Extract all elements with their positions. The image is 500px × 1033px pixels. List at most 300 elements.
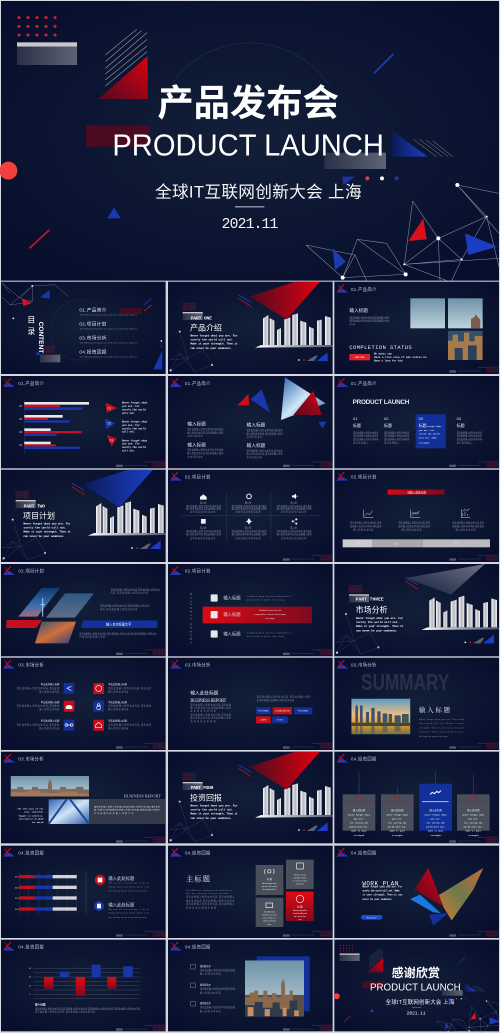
text blocks: 文本内容文本 bbox=[247, 435, 263, 439]
icon captions: 请在此处输入您的文本内容,请在此处 bbox=[186, 529, 222, 533]
band text: 输入您的文本内容请在此处输入您的文本内容,请在此处输入您的文 bbox=[94, 808, 160, 812]
right paragraph: 文本内容请在此处输入您的文本内容 bbox=[257, 698, 295, 702]
columns: 标题 bbox=[384, 422, 392, 428]
callout text: Have a love for him bbox=[374, 359, 403, 362]
card text: Never forget what bbox=[348, 813, 371, 816]
right text: 请在此处输入您的文本内容,请在此处 bbox=[108, 686, 152, 690]
blue small triangle bbox=[107, 207, 121, 218]
badge text: will not. bbox=[122, 431, 135, 434]
part label: PART ONE bbox=[191, 315, 212, 321]
title: 输入标题 bbox=[419, 705, 451, 714]
city photo bbox=[245, 960, 304, 1016]
paragraphs: 内容,请在此处输入您的文本内容 bbox=[100, 607, 138, 611]
horizontal bar chart: 02 bbox=[19, 419, 23, 421]
red funnel triangle bbox=[249, 752, 320, 789]
contents list: The difference between sex and love is that sex relieves bbox=[79, 341, 137, 344]
slide header: 03.市场分析 bbox=[18, 755, 44, 762]
heading: PRODUCT LAUNCH bbox=[353, 399, 410, 406]
item text: We are all not young, a lot of bbox=[108, 908, 149, 911]
cards: weakness bbox=[296, 883, 304, 885]
left text: 请在此处输入您的文本内容,请在此处 bbox=[17, 686, 60, 690]
section paragraph: can never be your weakness. bbox=[190, 346, 232, 350]
panel: completion status slide bbox=[334, 282, 499, 374]
band text: 本内容请在此处输入您的文本 bbox=[94, 811, 133, 815]
columns: 请在此处输入 bbox=[457, 441, 473, 445]
event name: 全球IT互联网创新大会 上海 bbox=[155, 183, 362, 202]
cards bbox=[343, 772, 490, 831]
section title: 投资回报 bbox=[190, 793, 222, 803]
row text bbox=[247, 595, 292, 638]
row text: Candid to have, but not bbox=[259, 609, 282, 612]
text blocks: 输入您的文本内容,请在此处输入您的 bbox=[247, 452, 283, 456]
card text: 输入此标题 bbox=[467, 808, 480, 812]
blue slash bbox=[374, 54, 393, 73]
panel: list slide bbox=[168, 564, 333, 656]
slide header: 03.市场分析 bbox=[18, 662, 44, 669]
badge text: surely the world bbox=[122, 427, 146, 430]
left paragraph: 输入您的文本内容,请在此处输入您的 bbox=[190, 706, 231, 710]
icon captions: 输入您的文本内容,请在此处输入您的 bbox=[232, 507, 267, 511]
list text: 请在此处输入您的文本内容请在此处 bbox=[200, 968, 236, 972]
triangle badges: 01 bbox=[107, 406, 111, 410]
heading: 目录: 录 bbox=[27, 327, 35, 336]
cards: it and it will never bbox=[293, 912, 307, 915]
triangle collage bbox=[237, 377, 327, 428]
columns: 请在此处输入您的文本内容 bbox=[457, 430, 483, 434]
chart captions: 此处输入您的文本内容,请在此处 bbox=[350, 524, 382, 528]
section paragraph: surely the world will not. bbox=[190, 338, 234, 342]
contents list bbox=[79, 306, 137, 358]
input heading: 输入标题 bbox=[349, 307, 368, 314]
red title bar: 请输入此处标题 bbox=[407, 490, 426, 494]
card text: strength bbox=[468, 834, 479, 837]
left text: 请在此处输入您的文本内容,请在此处 bbox=[17, 704, 60, 708]
icon captions: 输入框 bbox=[200, 525, 207, 529]
triangle badges: 03 bbox=[109, 439, 113, 443]
card text: you are. bbox=[354, 817, 364, 820]
card text: world will not. bbox=[464, 826, 483, 829]
icon captions: 文本内容文本内容文本 bbox=[281, 536, 307, 540]
circle icons bbox=[94, 875, 105, 911]
text blocks: 输入标题 bbox=[247, 422, 266, 429]
columns bbox=[353, 416, 483, 445]
icon captions: 输入框 bbox=[290, 525, 298, 529]
card text: you are. bbox=[430, 817, 441, 820]
badge text: Never forget what bbox=[122, 402, 148, 405]
right paragraph: 请在此处输入您的文本内容,请在此处输入您的 bbox=[257, 695, 311, 699]
cards: relieves tension bbox=[263, 919, 276, 922]
chart captions: 请在此处输入您的文本内容,请在 bbox=[452, 521, 485, 525]
card text: strength bbox=[392, 834, 403, 837]
chart captions bbox=[350, 521, 485, 532]
chart icons bbox=[364, 508, 470, 517]
left paragraph: 请在此处输入您的文本内容,请在此处 bbox=[190, 713, 232, 717]
red slash bbox=[29, 230, 49, 248]
item text: the young those once personally bbox=[108, 890, 148, 893]
list text: 副标题文本 bbox=[200, 1001, 212, 1005]
icon captions: 请在此处输入您的文本内容,请在此处 bbox=[277, 504, 312, 508]
divider bbox=[235, 206, 264, 207]
chart captions: 此处输入您的文本内容,请在此处 bbox=[398, 524, 431, 528]
panel: cover slide bbox=[0, 1, 499, 281]
panel: slanted photo slide bbox=[1, 564, 166, 656]
columns: 标题 bbox=[419, 422, 427, 428]
section title: 市场分析 bbox=[356, 604, 388, 614]
cards: Never yourself to bbox=[293, 909, 307, 912]
blue backing block bbox=[257, 956, 310, 1011]
section paragraph bbox=[190, 804, 238, 820]
cards: strength. Then it bbox=[293, 876, 307, 879]
text blocks: 请在此处输入您的文本内容,请在此处 bbox=[247, 428, 283, 432]
badge text: Never forget what bbox=[122, 439, 148, 442]
section paragraph: Make it your strength. Then it bbox=[190, 812, 238, 816]
panel: bar chart slide bbox=[1, 376, 166, 468]
icon captions: 输入您的文本内容,请在此处输入您的 bbox=[186, 532, 221, 536]
red button: start now bbox=[355, 356, 365, 359]
panel: business report slide bbox=[168, 658, 333, 750]
left text: 单击此处输入标题 bbox=[41, 719, 60, 723]
card text: 输入此标题 bbox=[353, 808, 366, 812]
panel: hanging cards slide bbox=[334, 752, 499, 843]
slide header: 01.产品简介 bbox=[185, 380, 211, 387]
right text: 输入您的文本内容 bbox=[108, 726, 129, 730]
section decoration and city bbox=[169, 765, 332, 842]
left text: happen to surprise, bbox=[19, 814, 43, 817]
section decoration and city bbox=[169, 295, 332, 372]
card text: Make it your bbox=[390, 830, 406, 833]
paragraph bbox=[362, 886, 403, 901]
photos bbox=[410, 298, 483, 360]
list text: 副标题文本 bbox=[200, 982, 212, 986]
list text bbox=[200, 964, 236, 1013]
item text: 输入此处标题 bbox=[108, 901, 135, 908]
columns: 请在此处输入您的文本内容 bbox=[353, 430, 379, 434]
row titles: 输入标题 bbox=[223, 630, 241, 637]
panel: part one section slide bbox=[168, 282, 333, 374]
badge text: you are. For bbox=[122, 443, 140, 446]
section paragraph: can never be your weakness. bbox=[23, 534, 65, 538]
vertical label: BUSINESS REPORT bbox=[189, 593, 193, 644]
card text: For surely the bbox=[464, 822, 483, 825]
slide header: 03.市场分析 bbox=[351, 662, 377, 669]
cards: the world will not bbox=[263, 888, 277, 891]
panel: main title cards slide bbox=[168, 846, 333, 938]
section decoration and city bbox=[2, 483, 165, 560]
dark red block bbox=[86, 125, 150, 147]
cover decoration shapes bbox=[0, 16, 499, 281]
stacked bar chart: 2020 bbox=[15, 887, 19, 889]
gray band bbox=[89, 799, 166, 824]
triangle badges bbox=[105, 403, 117, 447]
divider bbox=[412, 1006, 421, 1009]
icon captions: 文本内容文本内容文本 bbox=[190, 510, 216, 514]
left text bbox=[17, 807, 44, 824]
row titles bbox=[223, 594, 241, 637]
chart captions: 输入您的文本内容 bbox=[353, 528, 374, 532]
red dot grid bbox=[17, 16, 56, 36]
keyword buttons: PROGRAM bbox=[298, 710, 308, 713]
paragraphs: 请在此处输入您的文本内容,请在此处输入您的文本 bbox=[111, 587, 161, 591]
card text: For surely the bbox=[427, 822, 445, 825]
callout text: No music can bbox=[374, 353, 392, 356]
slide header: 04.投资回报 bbox=[18, 943, 44, 950]
row text: not rising bbox=[266, 617, 275, 620]
section title: 产品介绍 bbox=[190, 323, 222, 333]
section paragraph: Make it your strength. Then it bbox=[190, 342, 238, 346]
text blocks bbox=[187, 421, 283, 459]
icon captions: 输入框 bbox=[200, 501, 207, 505]
section paragraph: Never forget what you are. For bbox=[190, 334, 238, 338]
triangle badges: 02 bbox=[107, 422, 111, 426]
icon captions: 请在此处输入您的文本内容,请在此处 bbox=[232, 504, 267, 508]
columns: 请在此处输入您的文本内容 bbox=[384, 434, 410, 438]
sunset city photo bbox=[351, 699, 410, 734]
left paragraph: 输入您的文本内容,请在此处输入您的 bbox=[190, 716, 231, 720]
slide header: 02.项目计划 bbox=[185, 567, 211, 574]
paragraph: Never forget what you are. For bbox=[362, 886, 403, 889]
panel: photo collage slide bbox=[1, 752, 166, 843]
gray segmented bar: 03 bbox=[455, 543, 458, 545]
left text: intersperse on good bbox=[19, 818, 44, 821]
text blocks: 输入您的文本内容,请在此处输入您的 bbox=[187, 451, 223, 455]
network top left bbox=[2, 283, 68, 319]
title: 产品发布会 bbox=[157, 83, 339, 124]
small dots bbox=[342, 176, 399, 185]
chart text: 请在此处输入您的文本内容,请在此处输入您的文本内容 bbox=[35, 1010, 96, 1014]
cover decoration repeated bbox=[334, 945, 500, 1033]
columns: 请在此处输入您的文本内容 bbox=[457, 437, 483, 441]
panel: three chart slide bbox=[334, 470, 499, 562]
icon captions: 请在此处输入您的文本内容,请在此处 bbox=[186, 504, 222, 508]
section paragraph: Never forget what you are. For bbox=[356, 616, 404, 620]
cards: between sex and bbox=[262, 913, 276, 916]
chart captions: 请在此处输入您的文本内容,请在 bbox=[398, 521, 431, 525]
slide header: 04.投资回报 bbox=[351, 755, 377, 762]
network polygons bbox=[306, 183, 499, 281]
contents list: 02.项目计划 bbox=[79, 320, 107, 327]
right text: 单击此处输入标题 bbox=[108, 682, 128, 686]
horizontal bar chart: 04 bbox=[19, 445, 23, 447]
card text bbox=[348, 808, 485, 837]
list text: 输入您的文本内容 bbox=[200, 972, 221, 976]
card text: world will not. bbox=[349, 826, 369, 829]
cards: 标 题 bbox=[297, 904, 303, 908]
right text: 单击此处输入标题 bbox=[108, 719, 128, 723]
left text: 输入您的文本内容 bbox=[39, 726, 60, 730]
section title: 项目计划 bbox=[23, 511, 55, 521]
row icons bbox=[211, 594, 218, 638]
section decoration and city bbox=[336, 577, 499, 654]
striped lines bbox=[105, 29, 147, 86]
card text: Never forget what bbox=[386, 813, 409, 816]
card text: Make it your bbox=[466, 830, 482, 833]
stacked bar chart bbox=[15, 871, 77, 914]
paragraph: 您的文本内容,请在此处输入您的文本内容 bbox=[186, 898, 235, 902]
section paragraph: surely the world will not. bbox=[190, 808, 234, 812]
blue band bbox=[81, 620, 157, 628]
section paragraph bbox=[190, 334, 238, 350]
columns: 02 bbox=[384, 416, 389, 421]
row titles: 输入标题 bbox=[223, 594, 241, 601]
gray segmented bar: 02 bbox=[395, 543, 399, 545]
section paragraph: Make it your strength. Then it bbox=[356, 624, 404, 628]
icon captions: 文本内容文本内容文本 bbox=[190, 536, 216, 540]
row text: Candid to have, but not compromise. I bbox=[247, 595, 292, 598]
columns: 01 bbox=[353, 416, 358, 421]
gray bar top left bbox=[17, 42, 77, 65]
paragraph: Never forget what you are. For surely bbox=[419, 718, 465, 721]
text blocks: 输入标题 bbox=[247, 442, 266, 449]
card text: world will not. bbox=[388, 826, 407, 829]
list text: 输入您的文本内容 bbox=[200, 1009, 221, 1013]
contents list: The difference between sex and love is that sex relieves bbox=[79, 355, 137, 358]
blue band: 输入本次标题大字 bbox=[106, 621, 131, 626]
panel: part four section slide bbox=[168, 752, 333, 843]
red button bbox=[349, 354, 370, 360]
text blocks: 输入标题 bbox=[187, 421, 206, 428]
panel: part two section slide bbox=[1, 470, 166, 562]
text blocks: 请在此处输入您的文本内容,请在此处 bbox=[187, 448, 224, 452]
row titles: 输入标题 bbox=[223, 611, 241, 618]
card text: 输入此标题 bbox=[391, 808, 404, 812]
badge text: will not. bbox=[122, 412, 135, 415]
paragraph: will never be used in fact you bbox=[419, 735, 448, 738]
icon captions: 输入您的文本内容,请在此处输入您的 bbox=[277, 532, 312, 536]
item text: 输入此处标题 bbox=[108, 875, 135, 882]
columns: 标题 bbox=[457, 422, 465, 428]
red band bbox=[6, 620, 42, 628]
icon captions: 输入框 bbox=[245, 525, 252, 529]
card text: Make it your bbox=[351, 830, 367, 833]
heading: 目录: 目 bbox=[27, 316, 35, 325]
panel: thank you slide bbox=[334, 940, 500, 1033]
paragraph bbox=[186, 889, 235, 909]
paragraphs: 内容,请在此处输入您的文本内容 bbox=[111, 591, 149, 595]
paragraph: 请在此处输入您的文本内容,请在此处输入您的 bbox=[349, 315, 389, 319]
event name: 全球IT互联网创新大会 上海 bbox=[386, 998, 455, 1006]
gray funnel triangle bbox=[406, 564, 485, 595]
chart captions: 此处输入您的文本内容,请在此处 bbox=[452, 524, 485, 528]
cards: love is that sex bbox=[263, 916, 275, 919]
text blocks: 请在此处输入您的文本内容,请在此处 bbox=[247, 448, 283, 452]
keyword buttons: PROGRAM bbox=[258, 710, 269, 713]
panel: four column slide bbox=[334, 376, 499, 468]
cards: 标 题 bbox=[267, 877, 273, 881]
badge text: you are. For bbox=[122, 405, 140, 408]
right text: 请在此处输入您的文本内容,请在此处 bbox=[108, 704, 152, 708]
icon captions: 请在此处输入您的文本内容,请在此处 bbox=[232, 529, 267, 533]
horizontal bar chart bbox=[19, 400, 89, 453]
geometric collage bbox=[410, 868, 483, 926]
paragraph: The difference between sex and love is bbox=[186, 889, 232, 892]
panel: column chart slide bbox=[1, 940, 166, 1031]
item text: things don't just know, don't I am bbox=[108, 912, 149, 915]
contents list: 04.投资回报 bbox=[79, 348, 107, 355]
text blocks: 输入您的文本内容,请在此处输入您的 bbox=[187, 430, 223, 434]
chart captions: 请在此处输入您的文本内容,请在 bbox=[350, 521, 382, 525]
columns: Forget what bbox=[427, 425, 442, 428]
badge text: will not. bbox=[122, 449, 135, 452]
right paragraph bbox=[257, 695, 311, 702]
panel: six icon slide bbox=[168, 470, 333, 562]
callout text bbox=[374, 353, 427, 362]
slide header: 04.投资回报 bbox=[185, 943, 211, 950]
chart text bbox=[35, 1006, 141, 1014]
column chart: 40 bbox=[29, 977, 31, 979]
english label: BUSINESS REPORT bbox=[124, 793, 161, 798]
date: 2021.11 bbox=[222, 217, 279, 233]
panel: part three section slide bbox=[334, 564, 499, 656]
english subheading: BUSINESS REPORT bbox=[190, 699, 226, 704]
stacked bar chart: 2021 bbox=[15, 877, 19, 879]
blue funnel triangle bbox=[82, 470, 153, 507]
icon captions: 输入框 bbox=[245, 501, 252, 505]
left text: 单击此处输入标题 bbox=[41, 682, 60, 686]
list text: 请在此处输入您的文本内容请在此处 bbox=[200, 986, 236, 990]
dividers bbox=[182, 493, 320, 541]
columns: 03 bbox=[419, 416, 424, 421]
badge text: surely the world bbox=[122, 408, 146, 411]
ghost heading: SUMMARY bbox=[361, 669, 450, 695]
glass building photo bbox=[49, 799, 89, 824]
paragraph: 内容 bbox=[349, 322, 355, 326]
paragraphs bbox=[79, 587, 161, 639]
gray block bbox=[324, 153, 386, 169]
red triangle bbox=[98, 56, 148, 99]
icon captions: 文本内容文本内容文本 bbox=[235, 510, 261, 514]
cards: The difference bbox=[264, 911, 275, 913]
right text: 输入您的文本内容 bbox=[108, 707, 129, 711]
columns: 请在此处输入您的文本内容 bbox=[353, 434, 379, 438]
paragraph: surely the world will not. Make bbox=[362, 890, 400, 893]
columns: 请在此处输入您的文本内容 bbox=[384, 430, 410, 434]
panel: contents slide bbox=[1, 282, 166, 374]
slide header: 02.项目计划 bbox=[18, 567, 44, 574]
date: 2021.11 bbox=[407, 1010, 426, 1016]
left paragraph: 文本内容文本内容 bbox=[190, 709, 216, 713]
completion status: COMPLETION STATUS bbox=[349, 345, 412, 351]
columns: will not. Make bbox=[419, 437, 437, 440]
heading: WORK PLAN bbox=[362, 881, 399, 888]
text blocks: 请在此处输入您的文本内容,请在此处 bbox=[187, 427, 224, 431]
wide city photo bbox=[11, 776, 89, 797]
stacked bar chart: 2019 bbox=[15, 898, 19, 900]
row text: want to be in spirit, not rising bbox=[247, 598, 285, 601]
left text: 单击此处输入标题 bbox=[41, 700, 60, 704]
columns: strength. bbox=[419, 442, 430, 445]
left text: 输入您的文本内容 bbox=[39, 707, 60, 711]
icon squares bbox=[64, 683, 104, 731]
section paragraph: Never forget what you are. For bbox=[190, 804, 238, 808]
icon captions: 输入您的文本内容,请在此处输入您的 bbox=[232, 532, 267, 536]
cards: be used in fact bbox=[294, 915, 306, 918]
paragraph bbox=[349, 315, 390, 326]
card text: world will not. bbox=[426, 826, 445, 829]
slide header: 01.产品简介 bbox=[351, 380, 377, 387]
band text bbox=[94, 804, 160, 815]
gray segmented bar: 01 bbox=[357, 543, 360, 545]
subtitle english: PRODUCT LAUNCH bbox=[112, 128, 384, 162]
slide header: 02.项目计划 bbox=[351, 474, 377, 481]
paragraph: strength. Then it can never be your bbox=[419, 726, 464, 729]
keyword buttons: LEARN bbox=[260, 719, 267, 722]
right text bbox=[108, 682, 152, 730]
icon captions: 文本内容文本内容文本 bbox=[281, 510, 307, 514]
right text: 单击此处输入标题 bbox=[108, 700, 128, 704]
slide header: 04.投资回报 bbox=[351, 850, 377, 857]
cards: you bbox=[299, 919, 301, 921]
slide header: 01.产品简介 bbox=[351, 286, 377, 293]
